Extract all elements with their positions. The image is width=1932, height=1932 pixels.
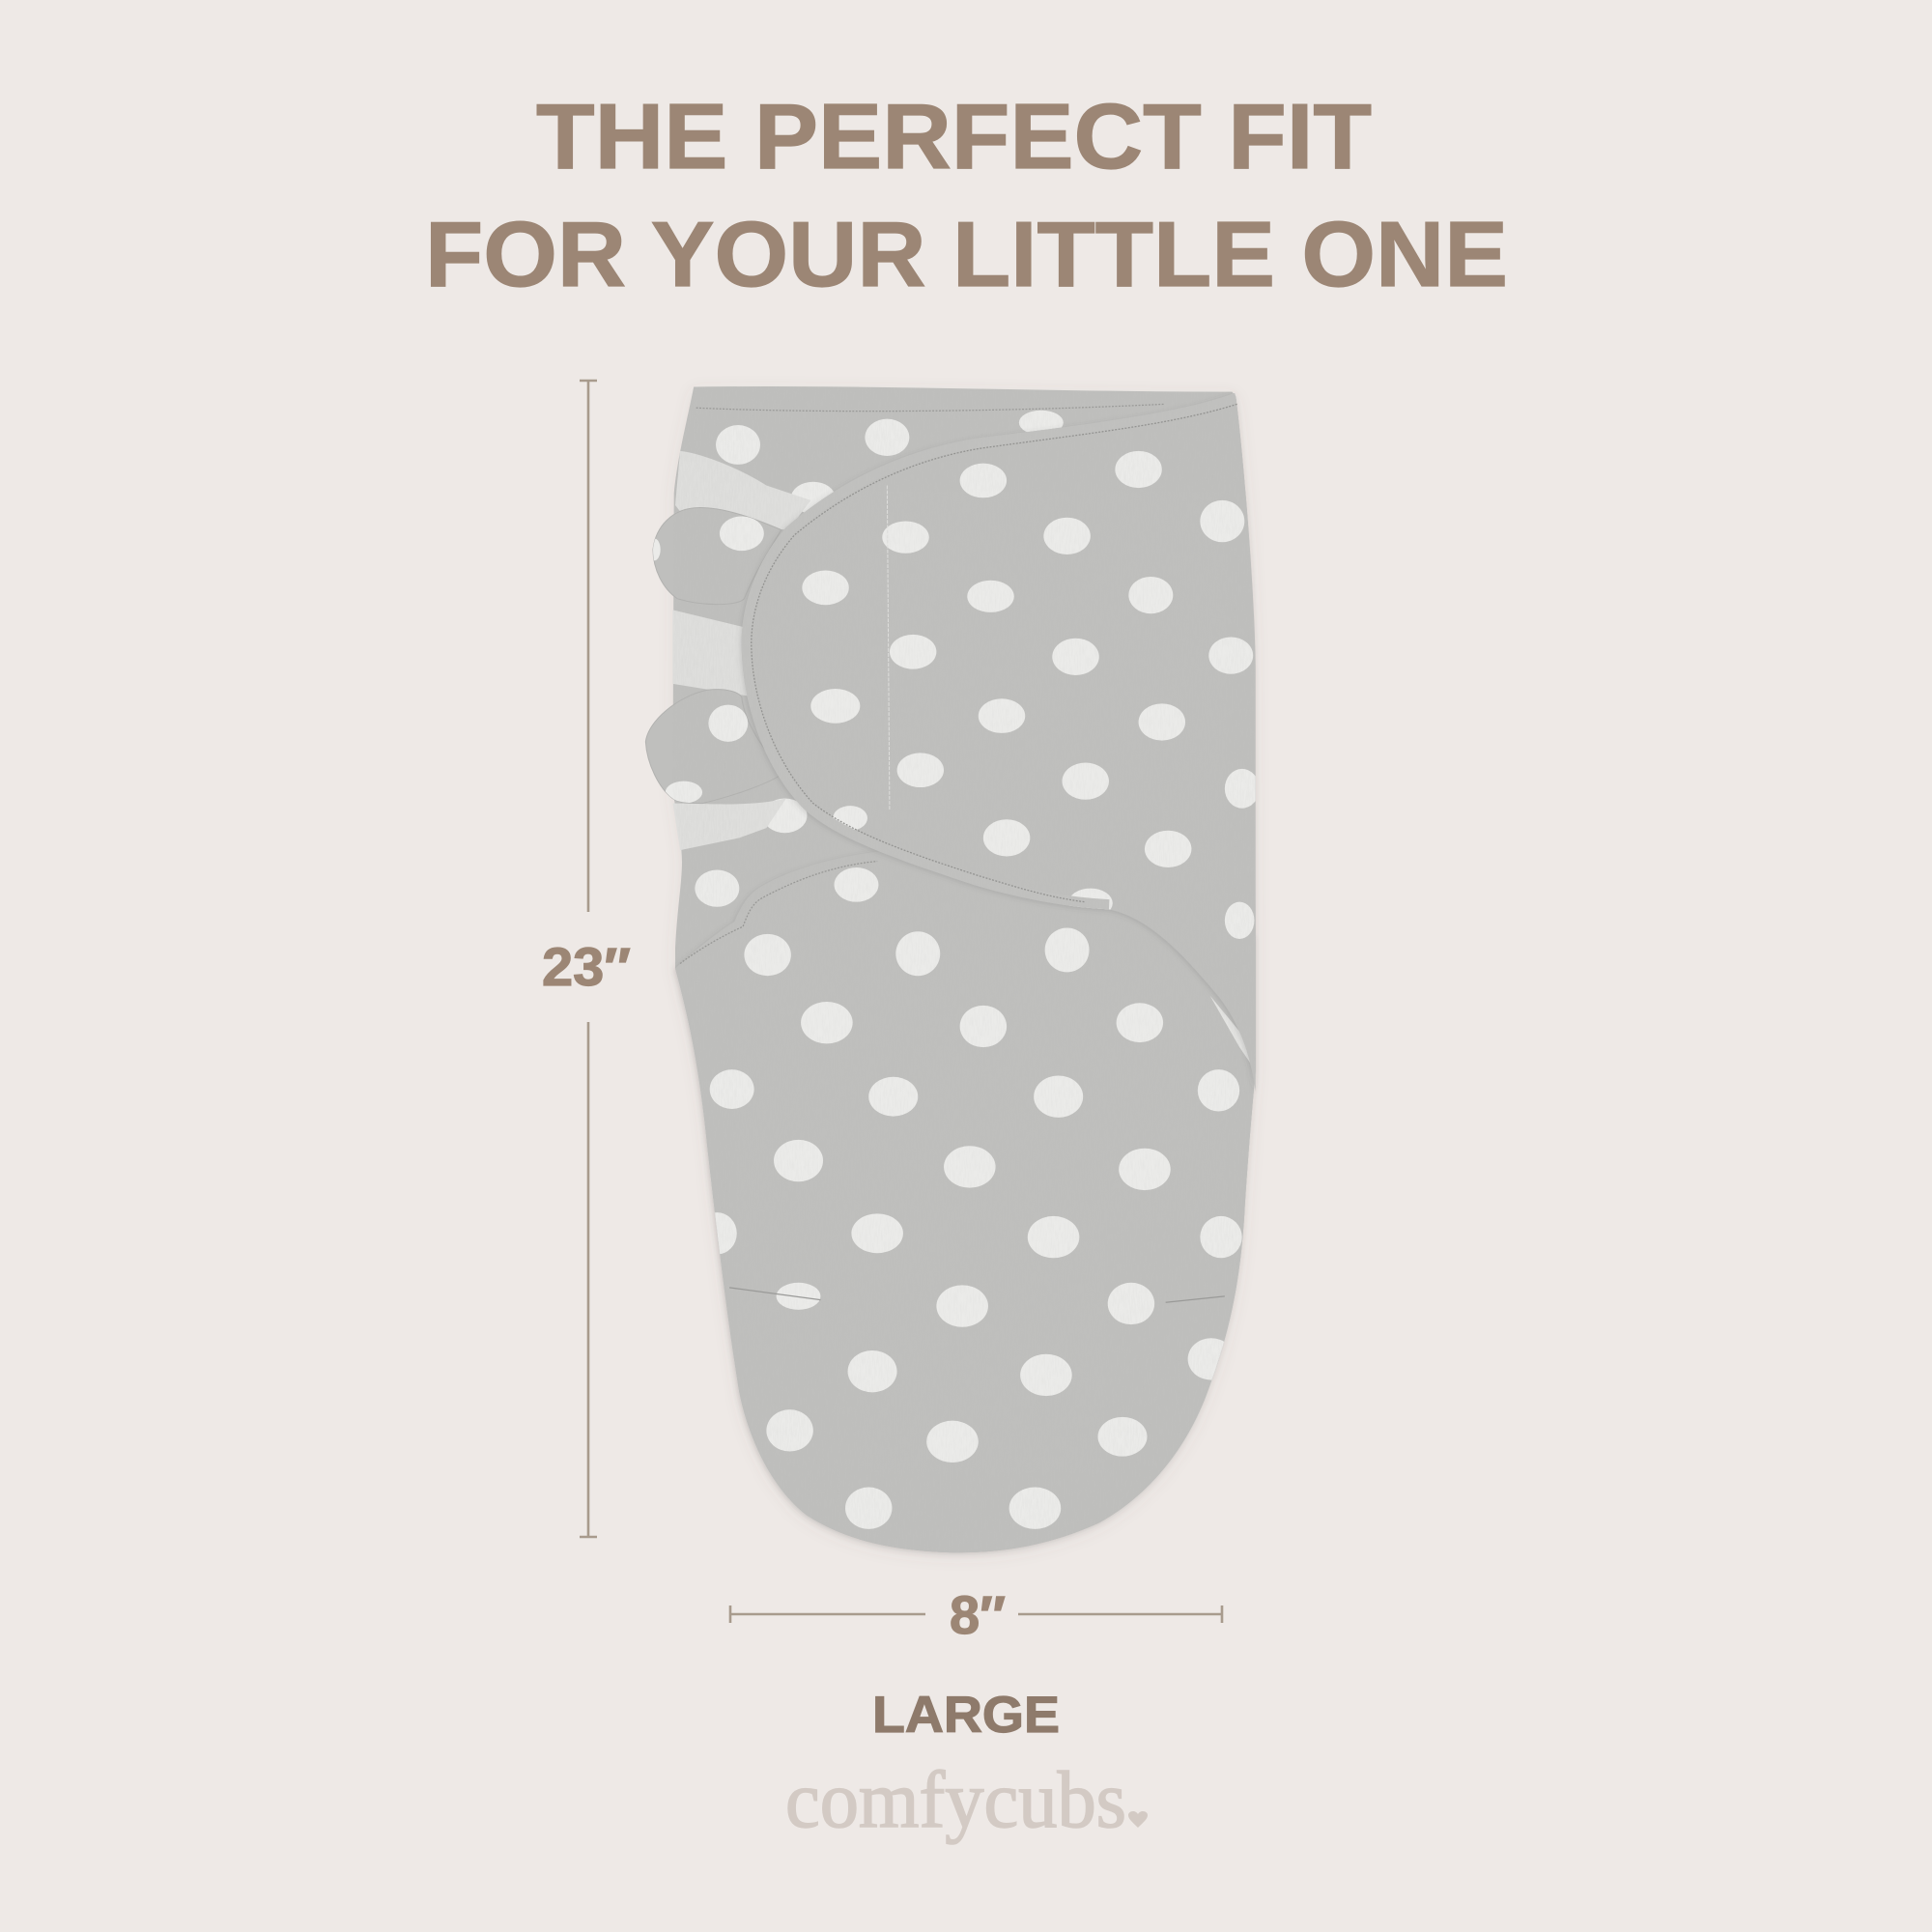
brand logo: comfycubs: [785, 1755, 1126, 1845]
title: FOR YOUR LITTLE ONE: [425, 203, 1508, 306]
title: THE PERFECT FIT: [536, 85, 1372, 188]
width dimension line: [730, 1605, 1222, 1623]
velcro strips: [672, 451, 810, 850]
bottom flap: [675, 850, 1256, 1552]
tab: lower wing: [645, 690, 786, 804]
width label: 8″: [950, 1584, 1006, 1645]
fabric weave texture: [666, 382, 1263, 1559]
title: [425, 85, 1508, 306]
back body of swaddle: [672, 386, 1256, 1552]
height dimension line: [580, 381, 597, 1537]
height label: 23″: [542, 936, 631, 997]
tab: upper wing: [648, 508, 781, 605]
swaddle illustration: [645, 382, 1263, 1559]
white sliver at right edge: [1210, 996, 1253, 1067]
main flap: [742, 393, 1260, 1092]
size label: LARGE: [872, 1687, 1060, 1744]
